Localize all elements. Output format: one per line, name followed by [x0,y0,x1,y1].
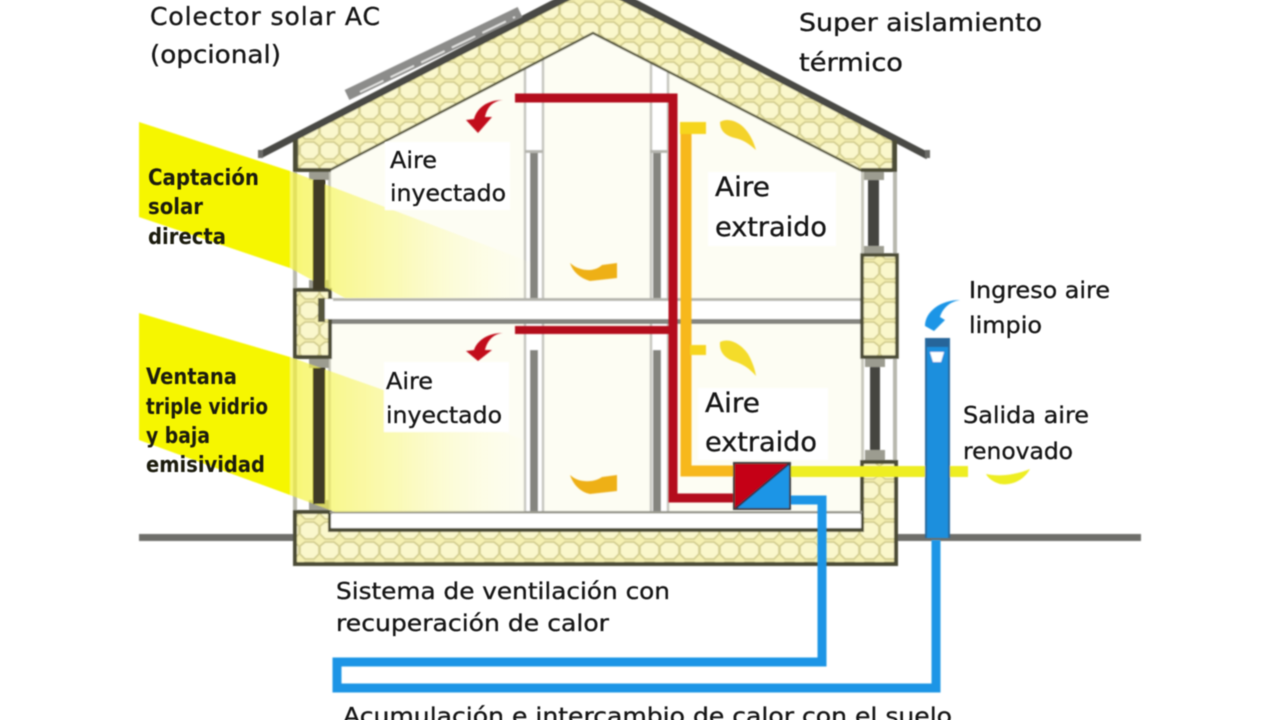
label: colector solar: (opcional) [150,40,281,69]
label: aire inyectado lower: inyectado [386,401,502,429]
floor white band [330,511,862,528]
label background: aire inyectado upper [385,142,510,210]
arrow: orange upper [570,263,617,281]
label: ventana triple vidrio: emisividad [146,453,265,478]
arrow: red upper [466,100,503,133]
label: sistema de ventilacion: Sistema de ventilación con [336,577,670,605]
label: ingreso aire limpio [969,276,1110,339]
left wall frame [293,170,331,565]
duct: exhaust yellow/orange [686,130,735,471]
arrow: yellow lower right [720,340,756,376]
fresh air intake column [925,338,950,538]
label: captacion solar directa: directa [148,225,226,250]
arrow: red lower [466,333,503,361]
label background: aire extraido lower [698,388,828,460]
label: aire extraido lower: extraido [705,427,817,458]
flow arrows [466,100,1030,494]
interior walls background [330,33,862,512]
label: captacion solar directa: solar [148,195,203,220]
right wall frame [861,170,897,510]
beam: lower [139,313,525,512]
heat recovery exchanger [734,463,790,509]
eave block frames [295,140,895,170]
label: colector solar: Colector solar AC [150,2,380,31]
duct: supply red [515,98,736,498]
label: aire inyectado upper: Aire [390,146,437,174]
label: colector solar [150,2,380,69]
solar beams [139,122,836,512]
label: super aislamiento: térmico [799,48,903,77]
label: aire extraido upper: extraido [715,212,827,243]
label: super aislamiento: Super aislamiento [799,8,1042,37]
label: captacion solar directa: Captación [148,166,259,191]
label: ventana triple vidrio [146,365,268,478]
labels [146,2,1110,720]
label: ingreso aire limpio: Ingreso aire [969,276,1110,304]
label: salida aire renovado [963,401,1089,465]
eave tails [258,150,930,158]
label: salida aire renovado: Salida aire [963,401,1089,429]
beam: upper [139,122,530,298]
house structure [139,0,1141,565]
label: ventana triple vidrio: triple vidrio [146,395,268,420]
ducts [337,98,968,688]
arrow: yellow exhaust [986,469,1030,484]
duct: outgoing air yellow [790,466,968,477]
label: ventana triple vidrio: Ventana [146,365,237,390]
intermediate floor slab [322,298,870,324]
insulation: roof [297,0,893,170]
ground line [139,534,1141,541]
label: super aislamiento [799,8,1042,77]
insulation: mid-floor left block [295,290,333,357]
arrow: blue intake [925,300,960,331]
label background: aire inyectado lower [384,362,509,432]
label: sistema de ventilacion: recuperación de calor [336,609,609,637]
insulation: foundation [295,462,896,564]
insulation: mid-floor right block [862,255,897,357]
label: aire inyectado upper [390,146,506,207]
arrow: yellow upper right [720,120,756,150]
roof covering [260,0,928,156]
label: aire inyectado upper: inyectado [390,179,506,207]
label: aire inyectado lower [386,367,502,429]
label: ingreso aire limpio: limpio [969,311,1042,339]
arrow: orange lower [570,475,617,494]
label: sistema de ventilacion [336,577,670,637]
label background: aire extraido upper [708,172,836,246]
label: captacion solar directa [148,166,259,250]
label: aire inyectado lower: Aire [386,367,433,395]
label: aire extraido lower: Aire [705,388,760,419]
label: aire extraido upper: Aire [715,172,770,203]
duct: blue ground loop [337,500,936,688]
duct: supply red lower branch [515,326,673,334]
solar collector [347,12,520,95]
label: aire extraido upper [715,172,827,243]
duct: outlet stubs yellow [680,122,706,355]
label: ventana triple vidrio: y baja [146,424,210,449]
windows: dark glazing columns [309,170,885,512]
label: aire extraido lower [705,388,817,458]
redraw window glazing over beams [313,180,325,504]
label: salida aire renovado: renovado [963,437,1073,465]
interior partition columns [525,60,668,512]
